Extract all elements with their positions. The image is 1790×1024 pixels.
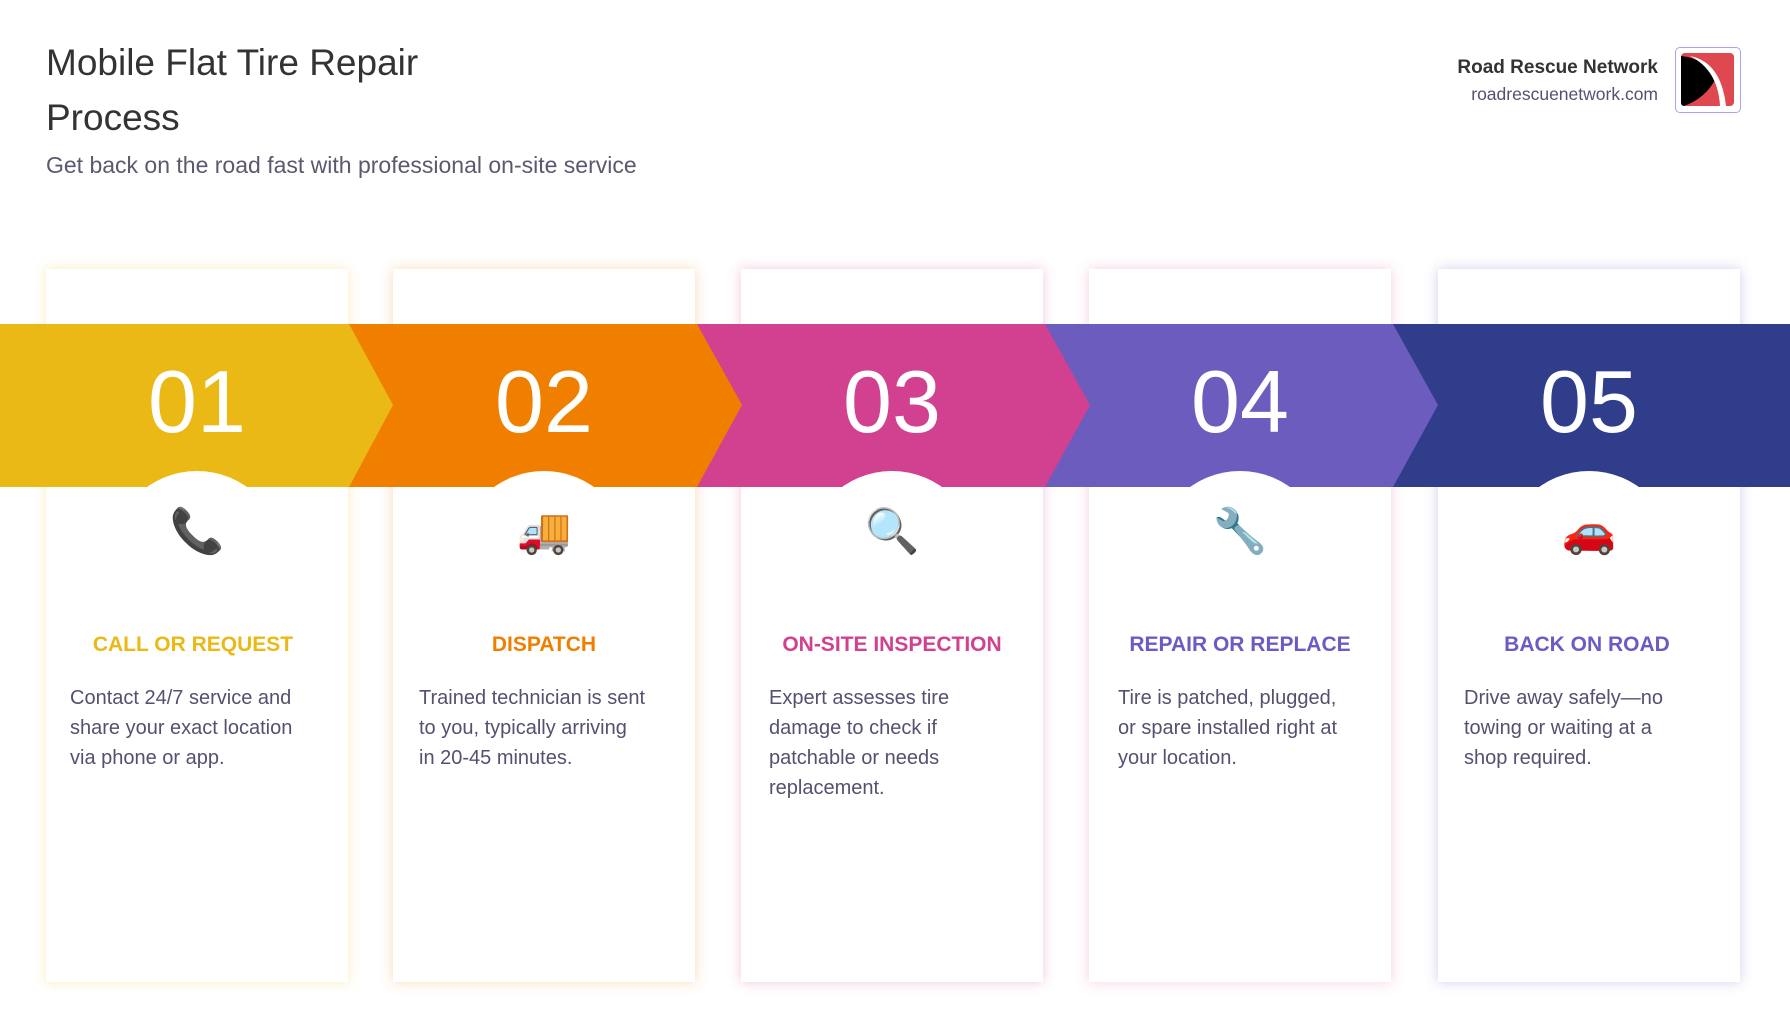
step 2: Trained technician is sent bbox=[419, 687, 645, 709]
step 3 bbox=[769, 352, 1002, 799]
step 3: 03 bbox=[843, 352, 941, 451]
step 1 bbox=[70, 352, 293, 769]
step 2: in 20-45 minutes. bbox=[419, 747, 572, 769]
step 5: BACK ON ROAD bbox=[1504, 633, 1670, 656]
step 2: 02 bbox=[495, 352, 593, 451]
step 4: 🔧 bbox=[1213, 507, 1267, 556]
step 4 bbox=[1118, 352, 1351, 769]
step 2 bbox=[419, 352, 645, 769]
brand name: Road Rescue Network bbox=[1457, 57, 1658, 78]
card 1 bbox=[46, 269, 348, 982]
logo bbox=[1675, 47, 1741, 113]
card 5 bbox=[1438, 269, 1740, 982]
step 2: to you, typically arriving bbox=[419, 717, 627, 739]
card 4 bbox=[1089, 269, 1391, 982]
step 4: Tire is patched, plugged, or spare installed right at your location. bbox=[1118, 687, 1337, 769]
brand url: roadrescuenetwork.com bbox=[1471, 84, 1658, 104]
step 5: 05 bbox=[1540, 352, 1638, 451]
step 2: DISPATCH bbox=[492, 633, 596, 656]
step 1: CALL OR REQUEST bbox=[93, 633, 293, 656]
step 5: 🚗 bbox=[1562, 507, 1616, 556]
step 3: ON-SITE INSPECTION bbox=[782, 633, 1002, 656]
step 4: 04 bbox=[1191, 352, 1289, 451]
step 1: 01 bbox=[148, 352, 246, 451]
step 1: Contact 24/7 service and share your exact location via phone or app. bbox=[70, 687, 292, 769]
step 2: 🚚 bbox=[517, 507, 571, 556]
step 1: 📞 bbox=[170, 507, 224, 556]
step 5 bbox=[1464, 352, 1670, 769]
subtitle: Get back on the road fast with professional on-site service bbox=[46, 152, 637, 178]
card 3 bbox=[741, 269, 1043, 982]
step 4: REPAIR OR REPLACE bbox=[1129, 633, 1351, 656]
title: Mobile Flat Tire Repair Process bbox=[46, 42, 418, 138]
step 5: Drive away safely—no towing or waiting at a shop required. bbox=[1464, 687, 1663, 769]
card 2 bbox=[393, 269, 695, 982]
step 3: Expert assesses tire damage to check if patchable or needs replacement. bbox=[769, 687, 949, 799]
step 3: 🔍 bbox=[865, 507, 919, 556]
